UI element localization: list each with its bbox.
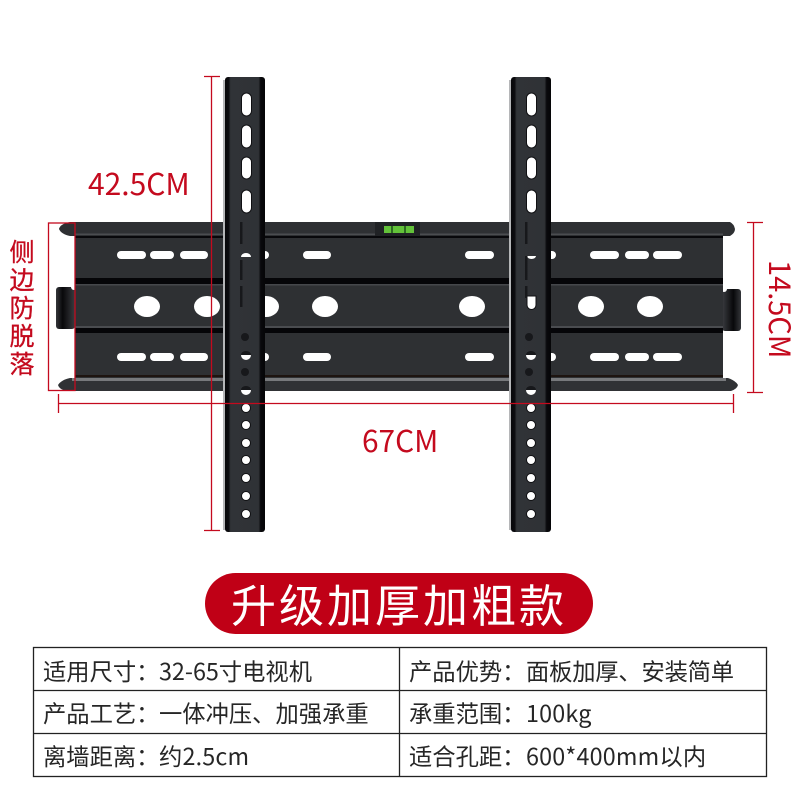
depth dimension line <box>747 222 763 392</box>
row 2 right: 100kg <box>526 695 592 729</box>
anti-drop vertical label: 落 <box>9 345 35 381</box>
height dimension line <box>204 76 220 530</box>
anti-drop vertical label <box>9 233 35 381</box>
spirit level <box>375 222 420 236</box>
row 3 left: 约2.5cm <box>159 738 249 772</box>
lower slots <box>117 353 682 361</box>
row 2 left: 产品工艺： <box>43 695 159 729</box>
row 1 right: 产品优势： <box>409 653 525 687</box>
side anti-drop tabs <box>56 284 741 331</box>
upper slots <box>117 251 682 259</box>
left upright <box>223 77 265 532</box>
top flange <box>59 222 735 236</box>
banner pill <box>205 570 593 635</box>
row 1 left: 32-65寸电视机 <box>159 653 312 687</box>
width label: 67CM <box>362 417 438 461</box>
bottom flange <box>58 378 738 391</box>
anti-drop vertical label: 侧 <box>9 233 35 269</box>
anti-drop highlight box <box>48 223 75 390</box>
row 3 right: 600*400mm以内 <box>526 738 706 772</box>
specification table <box>34 648 766 776</box>
horizontal panel <box>58 222 738 391</box>
height label: 42.5CM <box>88 160 190 204</box>
width dimension line <box>58 394 734 413</box>
anti-drop vertical label: 边 <box>9 261 35 297</box>
anti-drop vertical label: 防 <box>9 289 35 325</box>
row 3 left: 离墙距离： <box>43 738 159 772</box>
right upright <box>509 77 551 532</box>
wall mount bracket <box>56 77 741 532</box>
row 2 right: 承重范围： <box>409 695 525 729</box>
anti-drop vertical label: 脱 <box>9 317 35 353</box>
row 3 right: 适合孔距： <box>409 738 525 772</box>
banner text: 升级加厚加粗款 <box>231 570 567 635</box>
row 1 left: 适用尺寸： <box>43 653 159 687</box>
row 2 left: 一体冲压、加强承重 <box>159 695 369 729</box>
row 1 right: 面板加厚、安装简单 <box>526 653 734 687</box>
round mounting holes <box>134 296 663 317</box>
